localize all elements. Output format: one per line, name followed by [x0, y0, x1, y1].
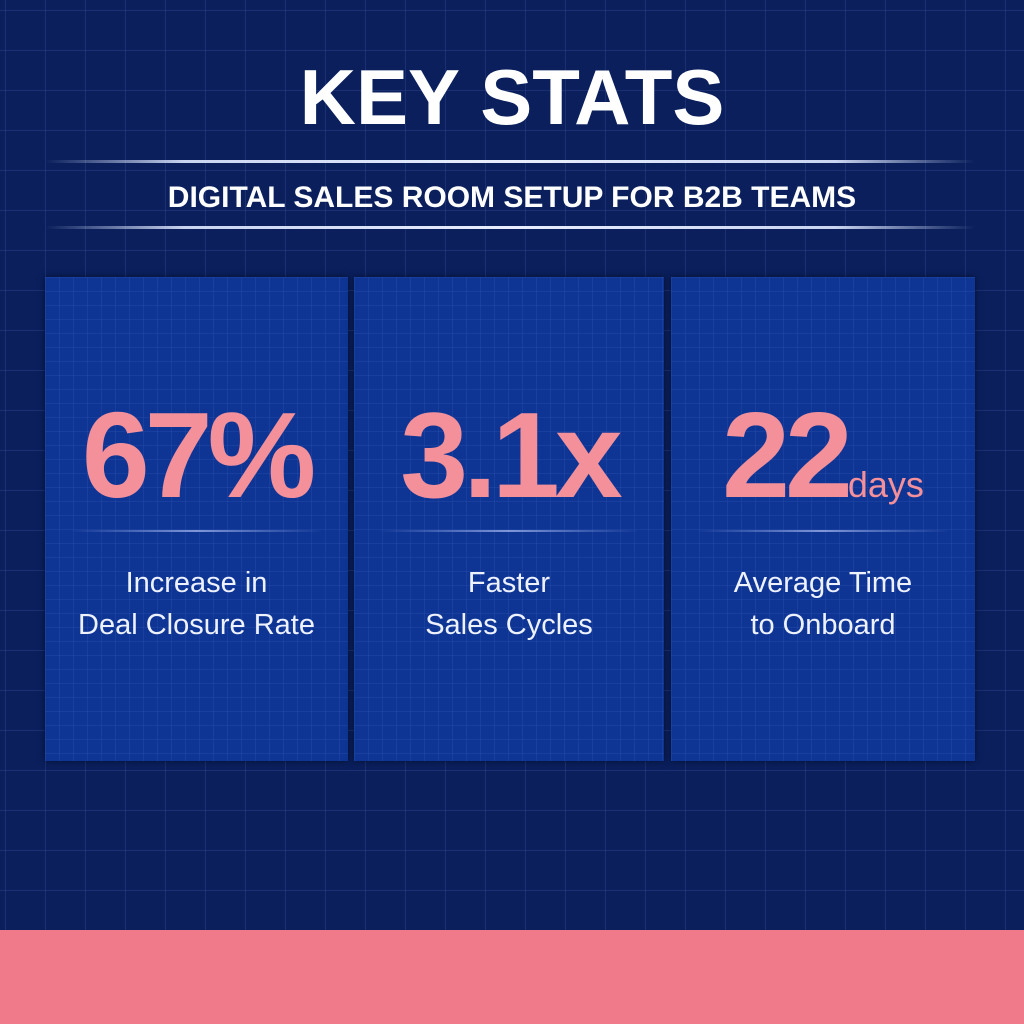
stat label [425, 567, 593, 641]
stat label: Increase in [126, 567, 267, 599]
panel: 3.1x [354, 277, 664, 761]
title: KEY STATS [300, 53, 724, 141]
stat label [734, 567, 912, 641]
stat label [78, 567, 315, 641]
footer band [0, 930, 1024, 1024]
stat number: 3.1x [400, 387, 618, 523]
stat label: Deal Closure Rate [78, 609, 315, 641]
panel: 67% [45, 277, 348, 761]
stat label: Average Time [734, 567, 912, 599]
stat label: to Onboard [750, 609, 896, 641]
stat label: Sales Cycles [425, 609, 593, 641]
stat number: 67% [82, 387, 311, 523]
stat label: Faster [468, 567, 550, 599]
subtitle: DIGITAL SALES ROOM SETUP FOR B2B TEAMS [168, 181, 856, 214]
panel: 22 days [671, 277, 975, 761]
stat number: 22days [722, 387, 924, 523]
